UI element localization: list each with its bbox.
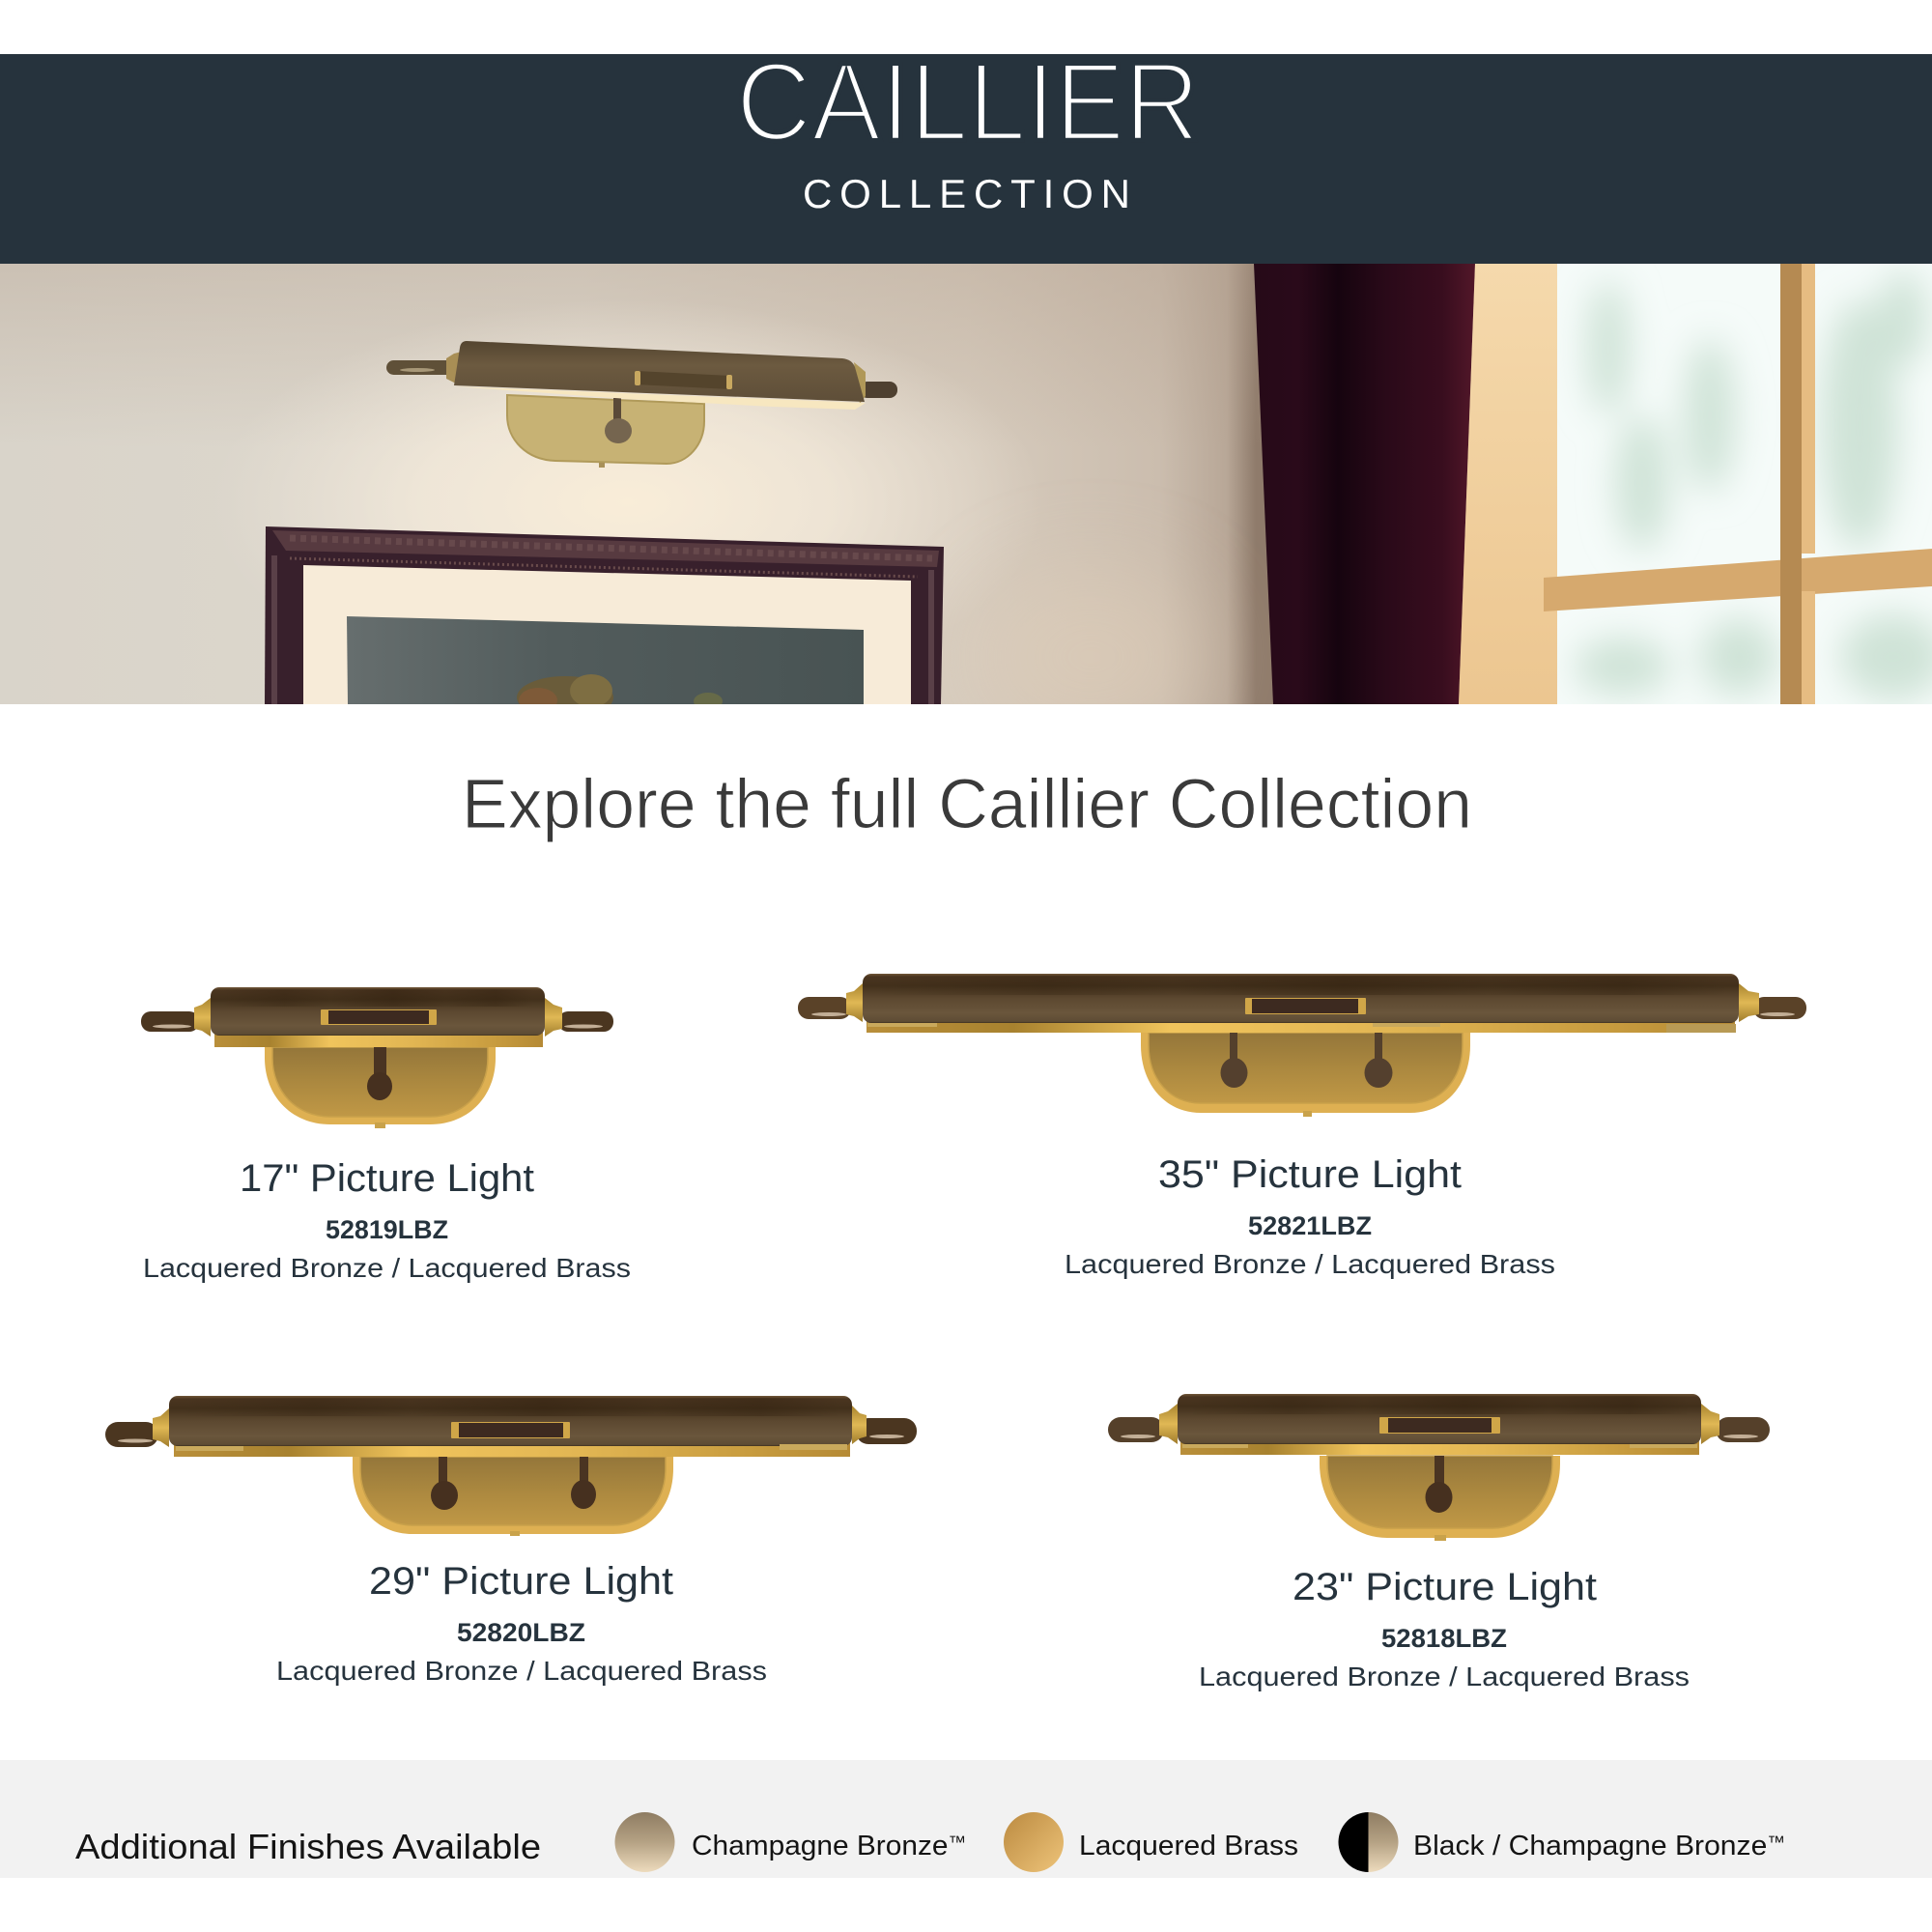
lamp image 29 <box>105 1396 917 1536</box>
framed picture <box>265 526 944 719</box>
label: black and champagne bronze: ™ <box>1767 1833 1785 1852</box>
product: 17 inch picture light <box>141 987 631 1283</box>
label 23: 23" Picture Light <box>1293 1566 1597 1608</box>
label: champagne bronze: ™ <box>948 1833 966 1852</box>
label 35: Lacquered Bronze / Lacquered Brass <box>1065 1249 1555 1279</box>
header banner <box>0 41 1932 264</box>
label 23: Lacquered Bronze / Lacquered Brass <box>1199 1662 1690 1691</box>
photo lamp <box>386 341 897 468</box>
finishes heading: Additional Finishes Available <box>75 1827 541 1866</box>
photo lamp handle <box>635 371 732 389</box>
photo lamp backplate <box>507 395 704 464</box>
curtain <box>1254 264 1475 704</box>
label 17: 52819LBZ <box>326 1215 448 1244</box>
subtitle: COLLECTION <box>803 171 1130 216</box>
label 17 <box>143 1157 631 1283</box>
title: CAILLIER <box>736 41 1200 164</box>
swatch: black and champagne bronze <box>1338 1812 1399 1872</box>
label 23 <box>1199 1566 1690 1691</box>
product: 23 inch picture light <box>1108 1394 1770 1691</box>
photo lamp collars <box>446 352 460 383</box>
lamp image 17 <box>141 987 613 1128</box>
label: champagne bronze: Champagne Bronze <box>692 1831 941 1861</box>
photo lamp light strip <box>453 386 866 410</box>
label 35: 52821LBZ <box>1248 1211 1372 1240</box>
product: 35 inch picture light <box>798 974 1806 1279</box>
hero photo: picture light over framed art by window <box>0 264 1932 744</box>
label 29: 52820LBZ <box>457 1618 585 1647</box>
label 35: 35" Picture Light <box>1158 1153 1462 1196</box>
photo lamp shade <box>454 341 865 402</box>
photo lamp arms <box>386 360 897 398</box>
finishes band <box>0 1760 1932 1878</box>
label 35 <box>1065 1153 1555 1279</box>
window frame and glass <box>1459 264 1932 704</box>
window muntins <box>1544 549 1932 611</box>
lamp image 35 <box>798 974 1806 1117</box>
swatch: lacquered brass <box>1004 1812 1064 1872</box>
label: black and champagne bronze: Black / Champagne Bronze <box>1413 1831 1754 1861</box>
label 17: Lacquered Bronze / Lacquered Brass <box>143 1253 631 1283</box>
swatch: champagne bronze <box>614 1812 674 1872</box>
label: lacquered brass: Lacquered Brass <box>1079 1831 1298 1861</box>
label 23: 52818LBZ <box>1381 1624 1507 1653</box>
product: 29 inch picture light <box>105 1396 917 1686</box>
label 29: 29" Picture Light <box>369 1560 673 1603</box>
section heading: Explore the full Caillier Collection <box>462 766 1472 843</box>
label 17: 17" Picture Light <box>240 1157 534 1200</box>
lamp image 23 <box>1108 1394 1770 1541</box>
label 29: Lacquered Bronze / Lacquered Brass <box>276 1656 767 1686</box>
label 29 <box>276 1560 767 1686</box>
